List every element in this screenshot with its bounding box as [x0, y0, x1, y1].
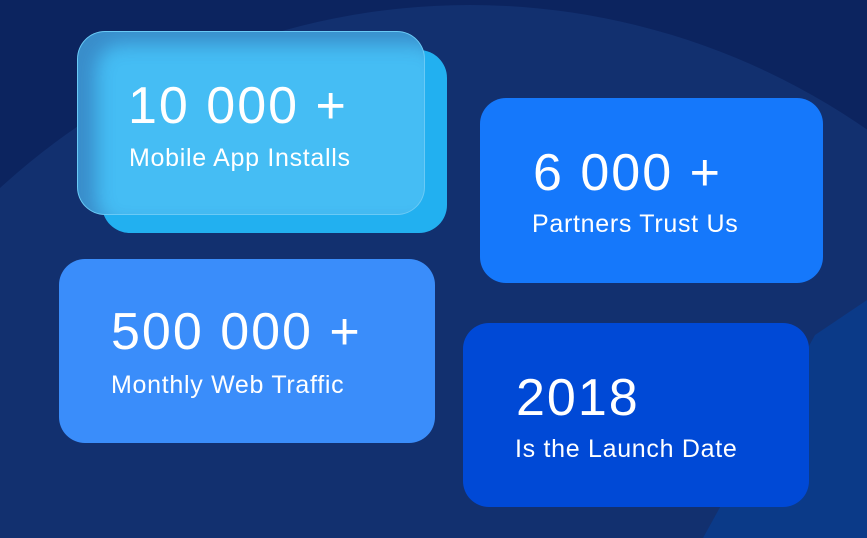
card: launch date	[463, 323, 809, 507]
label: Partners Trust Us	[532, 210, 738, 238]
card: web traffic	[59, 259, 435, 443]
stat: 10 000 +	[128, 77, 348, 135]
label: Mobile App Installs	[129, 144, 351, 172]
card: mobile app installs	[77, 31, 447, 233]
back card	[102, 50, 447, 233]
stat: 6 000 +	[533, 144, 722, 202]
label: Monthly Web Traffic	[111, 371, 344, 399]
stat: 2018	[516, 369, 640, 427]
card: partners	[480, 98, 823, 283]
stat: 500 000 +	[111, 303, 362, 361]
label: Is the Launch Date	[515, 435, 737, 463]
glass card	[77, 31, 425, 215]
